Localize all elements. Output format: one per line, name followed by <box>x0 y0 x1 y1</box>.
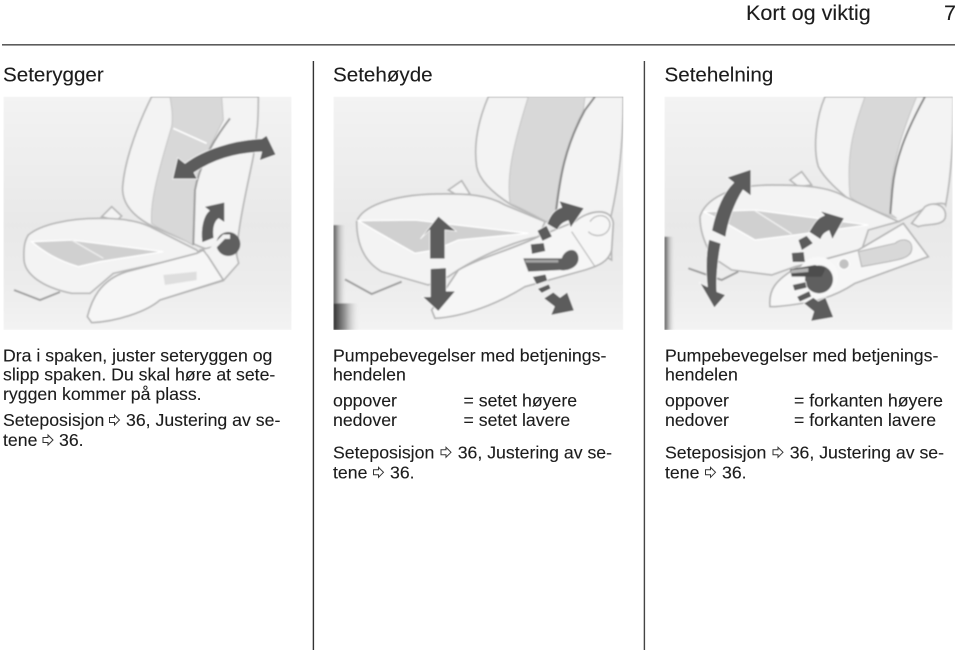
icon: reference arrow <box>706 467 716 477</box>
illustration: seat height adjustment <box>333 97 623 330</box>
instructions text: hendelen <box>333 365 406 385</box>
instructions text <box>3 346 280 450</box>
header rule <box>2 44 955 46</box>
instructions text: Dra i spaken, juster seteryggen og <box>3 346 272 366</box>
column divider right <box>644 61 645 650</box>
instructions text: oppover <box>333 391 397 411</box>
page number: 7 <box>944 0 956 25</box>
illustration: seat tilt adjustment <box>664 97 953 330</box>
heading: Seterygger: Seterygger <box>3 64 104 86</box>
instructions text: oppover <box>665 391 729 411</box>
instructions text: 36. <box>722 462 747 482</box>
panel: Setehøyde <box>333 64 623 482</box>
instructions text: hendelen <box>665 365 738 385</box>
icon: reference arrow <box>374 467 384 477</box>
instructions text: = forkanten lavere <box>794 410 936 430</box>
heading: Setehøyde: Setehøyde <box>333 64 433 86</box>
instructions text: = setet høyere <box>464 391 577 411</box>
instructions text: Pumpebevegelser med betjenings- <box>665 346 938 366</box>
icon: reference arrow <box>110 415 120 425</box>
instructions text: Pumpebevegelser med betjenings- <box>333 346 606 366</box>
instructions text: nedover <box>665 410 729 430</box>
instructions text: 36, Justering av se- <box>126 410 280 430</box>
panel: Setehelning <box>664 64 953 482</box>
instructions text: tene <box>333 462 368 482</box>
column divider left <box>313 61 314 650</box>
instructions text: tene <box>665 462 700 482</box>
instructions text: slipp spaken. Du skal høre at sete- <box>3 365 275 385</box>
icon: reference arrow <box>441 447 451 457</box>
illustration: backrest adjustment <box>3 97 292 330</box>
instructions text: nedover <box>333 410 397 430</box>
instructions text: = setet lavere <box>464 410 570 430</box>
heading: Setehelning: Setehelning <box>664 64 773 86</box>
instructions text: Seteposisjon <box>333 442 434 462</box>
instructions text <box>665 346 944 482</box>
icon: reference arrow <box>773 447 783 457</box>
instructions text: 36, Justering av se- <box>458 442 612 462</box>
instructions text: tene <box>3 430 38 450</box>
instructions text: Seteposisjon <box>3 410 104 430</box>
instructions text: = forkanten høyere <box>794 391 943 411</box>
instructions text: 36. <box>59 430 84 450</box>
chapter title: Kort og viktig <box>746 0 871 25</box>
instructions text: Seteposisjon <box>665 442 766 462</box>
instructions text <box>333 346 612 482</box>
instructions text: 36, Justering av se- <box>790 442 944 462</box>
instructions text: 36. <box>390 462 415 482</box>
icon: reference arrow <box>43 435 53 445</box>
panel: Seterygger <box>3 64 292 450</box>
page header <box>2 0 956 46</box>
instructions text: ryggen kommer på plass. <box>3 384 202 404</box>
